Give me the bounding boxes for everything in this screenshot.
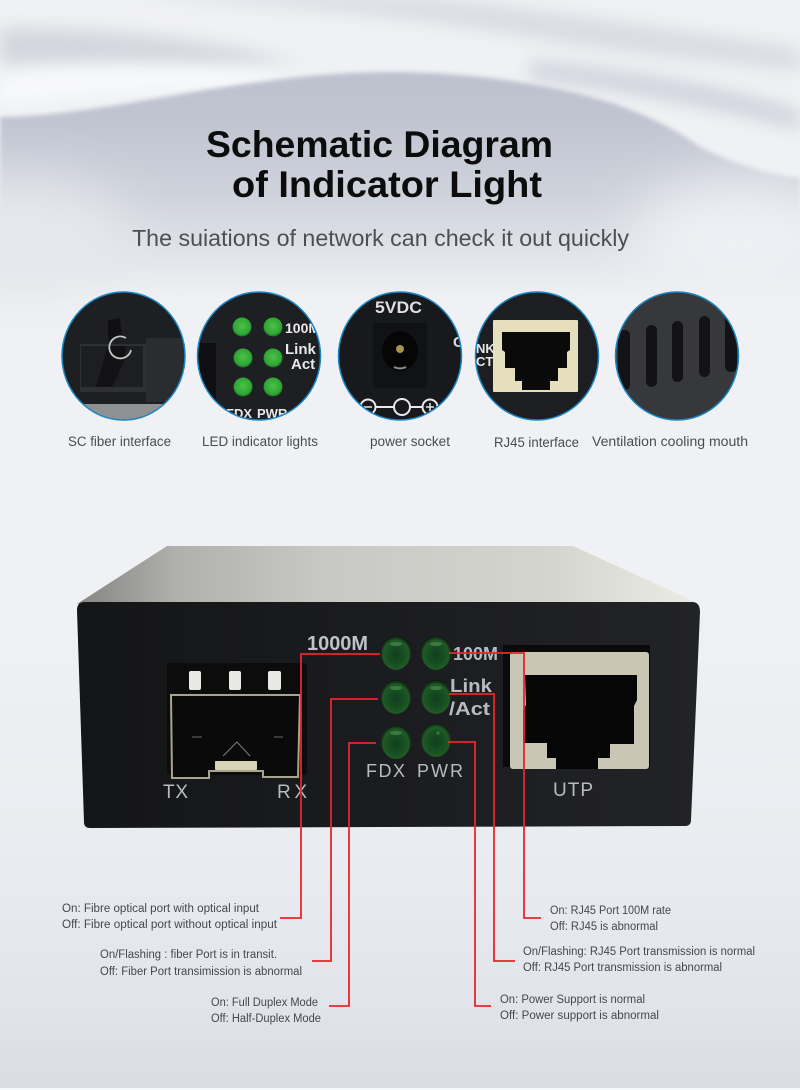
feature: LED indicator lights xyxy=(196,290,322,449)
LED panel labels: FDX xyxy=(366,761,405,781)
feature: SC fiber interface xyxy=(60,290,188,449)
device top face xyxy=(77,546,700,604)
callout: fiber port transit xyxy=(100,949,302,978)
callout: power support xyxy=(500,994,659,1022)
callout: RJ45 100M rate: On: RJ45 Port 100M rate xyxy=(550,905,671,917)
icon: LED panel circle: PWR xyxy=(257,406,288,421)
callout: RJ45 transmission xyxy=(523,946,755,974)
icon: LED panel circle: FDX xyxy=(226,406,252,421)
subtitle: The suiations of network can check it out quickly xyxy=(132,225,630,251)
callout: RJ45 100M rate: Off: RJ45 is abnormal xyxy=(550,921,658,933)
callout: fibre optical port: On: Fibre optical port with optical input xyxy=(62,903,260,915)
icon: ventilation slots circle xyxy=(613,290,741,422)
label: Ventilation cooling mouth xyxy=(592,434,748,449)
callout: duplex mode xyxy=(211,997,321,1025)
callout: RJ45 100M rate xyxy=(550,905,671,933)
device front panel xyxy=(77,602,700,828)
RJ45 port: UTP xyxy=(553,780,593,801)
icon: RJ45 port circle: CT xyxy=(476,354,493,369)
title: Schematic Diagram xyxy=(206,124,553,165)
feature: Ventilation cooling mouth xyxy=(592,290,748,449)
LED lights xyxy=(381,636,451,759)
callout: fiber port transit: On/Flashing : fiber Port is in transit. xyxy=(100,949,277,961)
SFP port: RX xyxy=(277,782,307,803)
LED panel labels: Link xyxy=(450,676,493,696)
callout lines xyxy=(280,653,541,1006)
LED panel labels: /Act xyxy=(449,699,490,719)
icon: DC power socket circle: C xyxy=(453,334,464,351)
callout: power support: Off: Power support is abnormal xyxy=(500,1010,659,1022)
icon: SC fiber port circle xyxy=(60,290,188,422)
LED panel labels: 1000M xyxy=(307,633,368,655)
SFP port: TX xyxy=(163,782,188,803)
icon: LED panel circle: Link xyxy=(285,341,316,358)
icon: RJ45 port circle: NK xyxy=(476,341,495,356)
callout: RJ45 transmission: On/Flashing: RJ45 Port transmission is normal xyxy=(523,946,755,958)
LED panel labels: PWR xyxy=(417,761,463,781)
icon: DC power socket circle: 5VDC xyxy=(375,299,422,317)
callout: power support: On: Power Support is normal xyxy=(500,994,645,1006)
callout: fibre optical port: Off: Fibre optical port without optical input xyxy=(62,919,278,931)
title xyxy=(206,124,553,205)
RJ45 port xyxy=(503,645,650,801)
callout: duplex mode: On: Full Duplex Mode xyxy=(211,997,318,1009)
icon: LED panel circle: Act xyxy=(291,356,315,373)
icon: DC power socket circle xyxy=(336,290,464,422)
LED panel labels xyxy=(307,633,498,781)
title: of Indicator Light xyxy=(232,164,542,205)
icon: RJ45 port circle xyxy=(473,290,601,422)
LED panel labels: 100M xyxy=(453,644,498,664)
label: RJ45 interface xyxy=(494,435,579,450)
feature: RJ45 interface xyxy=(473,290,601,450)
label: power socket xyxy=(370,434,450,449)
callout: duplex mode: Off: Half-Duplex Mode xyxy=(211,1013,321,1025)
SFP port xyxy=(163,663,307,803)
icon: LED panel circle: 100M xyxy=(285,320,320,336)
icon: LED panel circle xyxy=(196,290,322,422)
feature: power socket xyxy=(336,290,464,449)
label: LED indicator lights xyxy=(202,434,318,449)
label: SC fiber interface xyxy=(68,434,171,449)
callout: fiber port transit: Off: Fiber Port transimission is abnormal xyxy=(100,966,302,978)
callout: fibre optical port xyxy=(62,903,278,931)
device: media converter xyxy=(77,546,700,828)
callout: RJ45 transmission: Off: RJ45 Port transmission is abnormal xyxy=(523,962,722,974)
